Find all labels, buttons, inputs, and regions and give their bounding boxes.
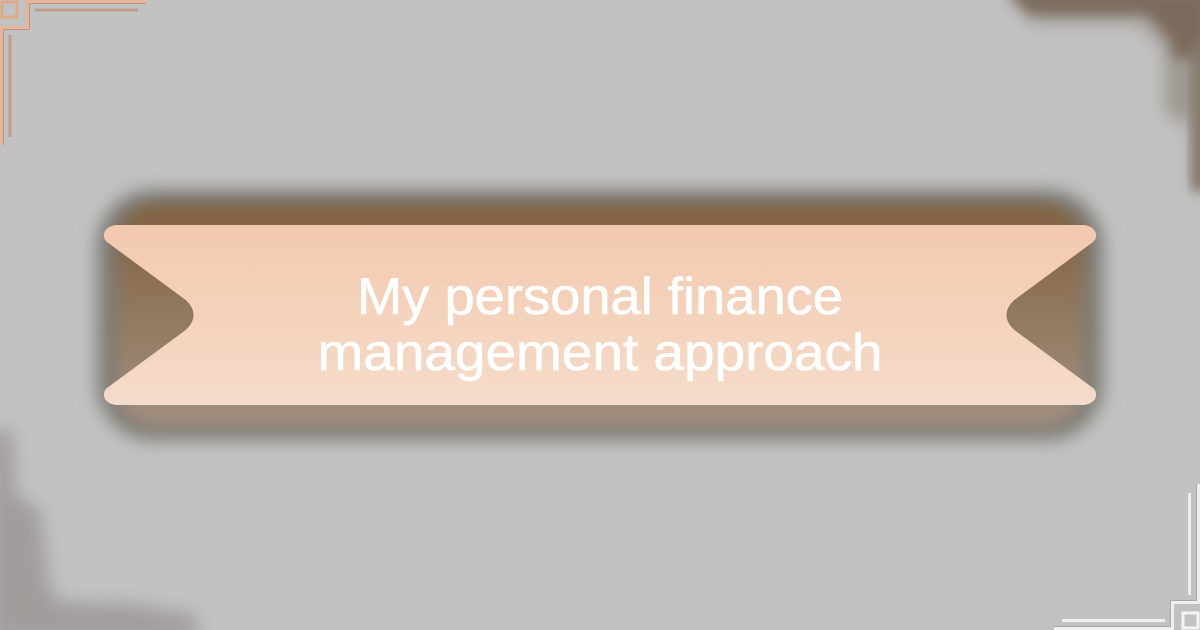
decorative frame: bottom right — [1054, 484, 1198, 628]
title — [318, 268, 882, 382]
blurred corner shadow: bottom left — [0, 430, 200, 630]
title: management approach — [318, 324, 882, 382]
ribbon shadow — [97, 190, 1103, 440]
blurred corner shadow: top right — [1005, 0, 1200, 190]
decorative frame: top left — [2, 2, 146, 145]
ribbon banner — [104, 225, 1096, 405]
title: My personal finance — [357, 268, 843, 326]
